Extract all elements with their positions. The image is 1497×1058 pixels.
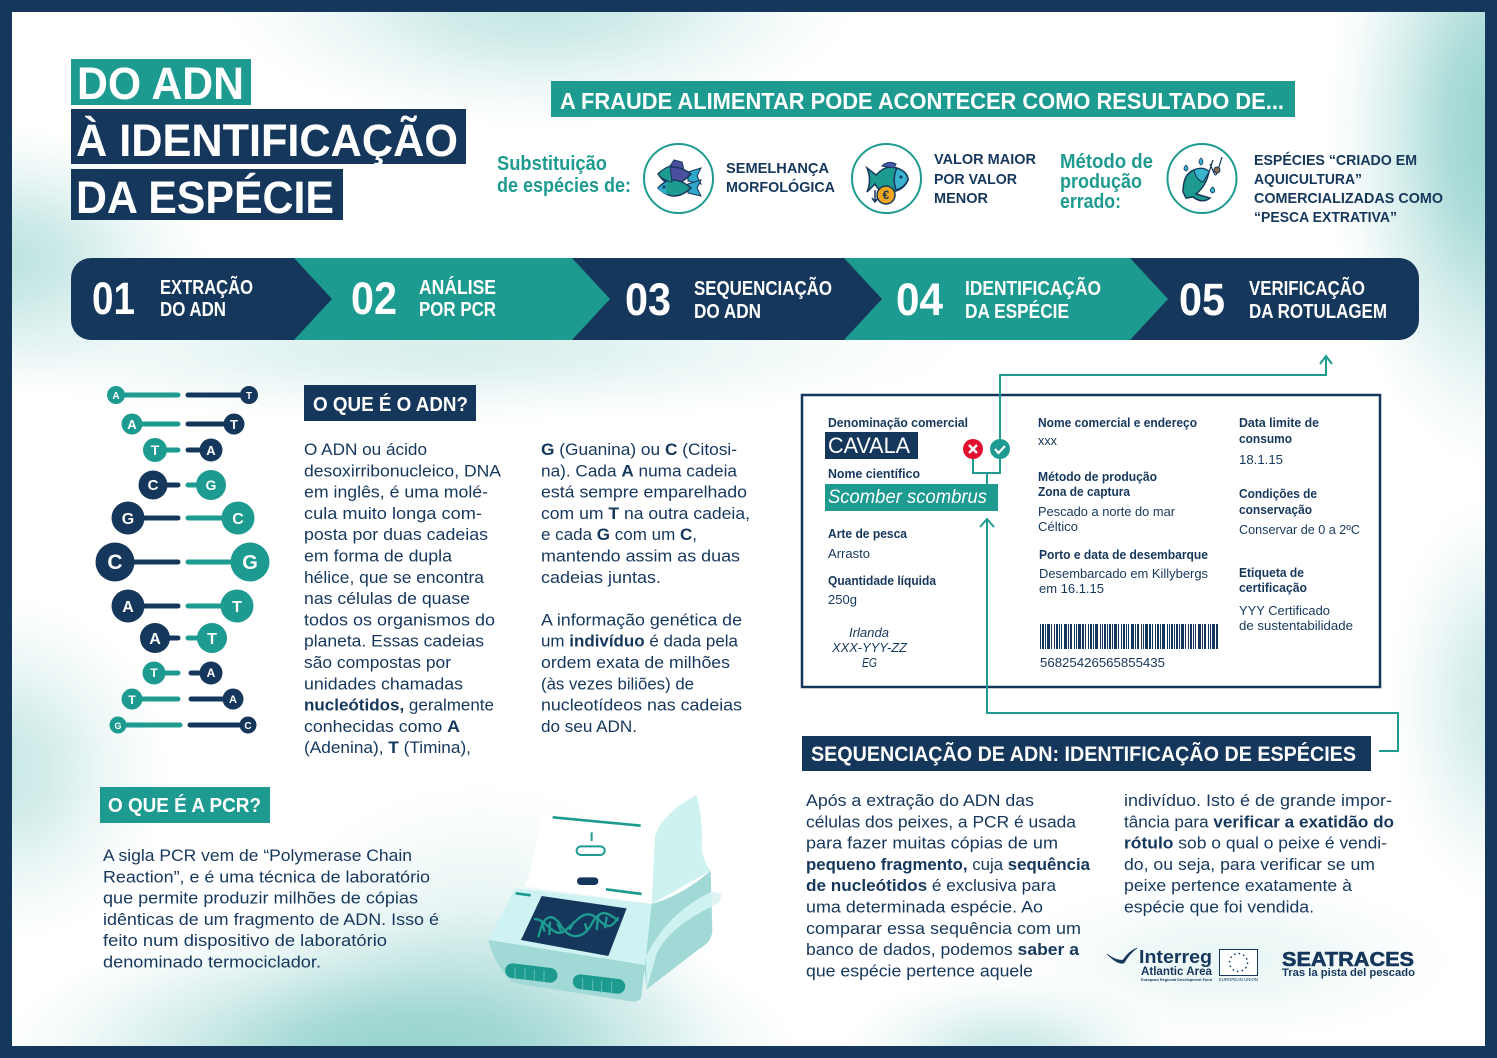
text: what is DNA, column 1: [304, 440, 502, 757]
DNA helix diagram: [96, 386, 270, 734]
icon: fish with euro coin: [852, 144, 921, 213]
text: sequencing, column 1: células dos peixes, a PCR é usada: [806, 812, 1077, 831]
label field: storage conditions: Condições de: [1239, 487, 1317, 501]
DNA helix diagram: A: [127, 417, 137, 432]
step 04: 04: [896, 274, 943, 325]
DNA helix diagram: A: [149, 631, 161, 648]
text: what is DNA, column 1: nucleótidos, geralmente: [304, 696, 494, 715]
label field: fishing gear: Arte de pesca: [828, 527, 908, 541]
text: what is DNA, column 1: em inglês, é uma molé-: [304, 483, 488, 502]
label field: port and landing date: Desembarcado em Killybergs: [1039, 567, 1208, 581]
text: what is DNA, column 1: cula muito longa com-: [304, 504, 482, 523]
heading: food fraud: A FRAUDE ALIMENTAR PODE ACONTECER COMO RESULTADO DE...: [560, 88, 1284, 114]
text: what is PCR: feito num dispositivo de laboratório: [103, 931, 387, 950]
text: what is DNA, column 2: nucleotídeos nas cadeias: [541, 696, 742, 715]
text: what is DNA, column 1: desoxirribonucleico, DNA: [304, 461, 502, 480]
text: what is DNA, column 2: A informação genética de: [541, 610, 742, 629]
step 01: DO ADN: [160, 299, 226, 321]
text: what is DNA, column 1: unidades chamadas: [304, 674, 463, 693]
barcode: 56825426565855435: [1040, 656, 1165, 670]
step 02: 02: [351, 273, 397, 324]
step 01: 01: [92, 273, 135, 324]
heading: food fraud: [551, 81, 1295, 117]
icon: correct mark: [990, 439, 1010, 459]
DNA helix diagram: C: [148, 477, 159, 494]
label field: origin mark: XXX-YYY-ZZ: [831, 641, 907, 655]
DNA helix diagram: T: [207, 631, 217, 648]
text: wrong production method: [1060, 151, 1153, 213]
heading: what is DNA: O QUE É O ADN?: [313, 393, 468, 416]
logo: Interreg Atlantic Area: European Regional Development Fund: [1141, 977, 1213, 982]
text: what is PCR: A sigla PCR vem de “Polymerase Chain: [103, 846, 412, 865]
logo: Interreg Atlantic Area: [1107, 947, 1258, 982]
label field: origin mark: Irlanda: [849, 626, 889, 640]
title: [71, 58, 466, 223]
logo: Seatraces: Tras la pista del pescado: [1282, 967, 1415, 979]
step 04: IDENTIFICAÇÃO: [965, 277, 1101, 300]
text: sequencing, column 2: rótulo sob o qual o peixe é vendi-: [1124, 834, 1387, 853]
step 01: [92, 273, 253, 324]
label field: production method: [1038, 470, 1175, 534]
text: what is PCR: denominado termociclador.: [103, 952, 321, 972]
text: what is DNA, column 2: está sempre emparelhado: [541, 483, 747, 502]
label field: port and landing date: em 16.1.15: [1039, 582, 1104, 596]
text: what is DNA, column 2: na). Cada A numa cadeia: [541, 461, 738, 480]
label field: storage conditions: [1239, 487, 1360, 537]
connector between marks and scientific name: [973, 459, 1000, 484]
label field: production method: Pescado a norte do mar: [1038, 505, 1175, 519]
logo: Interreg Atlantic Area: Atlantic Area: [1141, 966, 1213, 978]
DNA helix diagram: T: [128, 693, 136, 707]
heading: what is PCR: O QUE É A PCR?: [108, 794, 261, 817]
label field: origin mark: EG: [862, 656, 877, 670]
DNA helix diagram: G: [242, 552, 258, 574]
label field: certification: Etiqueta de: [1239, 566, 1304, 580]
text: species substitution: de espécies de:: [497, 175, 631, 197]
label field: certification: YYY Certificado: [1239, 604, 1330, 618]
step 03: SEQUENCIAÇÃO: [694, 277, 832, 300]
DNA helix diagram: G: [114, 721, 122, 731]
step 05: 05: [1179, 274, 1225, 325]
text: what is PCR: Reaction”, e é uma técnica de laboratório: [103, 867, 430, 886]
text: sequencing, column 1: que espécie pertence aquele: [806, 961, 1033, 980]
text: higher value for lower value: MENOR: [934, 190, 988, 207]
text: what is DNA, column 2: G (Guanina) ou C (Citosi-: [541, 440, 737, 459]
text: what is DNA, column 2: com um T na outra cadeia,: [541, 504, 750, 523]
label field: scientific name: [825, 467, 998, 511]
heading: DNA sequencing: [802, 736, 1371, 771]
step 03: [625, 274, 832, 325]
label field: production method: Zona de captura: [1038, 485, 1131, 499]
illustration: thermocycler: [488, 795, 722, 1002]
text: sequencing, column 1: [806, 791, 1091, 980]
text: species substitution: Substituição: [497, 153, 607, 175]
DNA helix diagram: C: [107, 551, 123, 574]
label field: net quantity: Quantidade líquida: [828, 574, 937, 588]
DNA helix diagram: G: [206, 477, 217, 493]
icon: two similar fish: [644, 144, 713, 213]
label field: fishing gear: Arrasto: [828, 547, 870, 561]
DNA helix diagram: T: [232, 599, 242, 616]
logo: Seatraces: SEATRACES: [1282, 949, 1414, 971]
step 04: DA ESPÉCIE: [965, 300, 1069, 323]
DNA helix diagram: A: [229, 694, 237, 706]
text: morphological similarity: MORFOLÓGICA: [726, 178, 835, 196]
text: what is DNA, column 2: (às vezes biliões) de: [541, 674, 694, 693]
DNA helix diagram: C: [244, 721, 252, 732]
text: morphological similarity: SEMELHANÇA: [726, 160, 829, 177]
text: higher value for lower value: VALOR MAIOR: [934, 151, 1036, 168]
DNA helix diagram: A: [206, 443, 216, 458]
text: what is DNA, column 2: [541, 440, 750, 736]
step 04: [896, 274, 1101, 325]
process arrow band: [71, 258, 1419, 340]
label field: use-by date: [1239, 416, 1319, 467]
text: what is DNA, column 1: conhecidas como A: [304, 717, 460, 736]
label field: commercial name: [825, 416, 968, 459]
text: what is PCR: idênticas de um fragmento de ADN. Isso é: [103, 910, 439, 929]
text: higher value for lower value: [934, 151, 1036, 207]
DNA helix diagram: A: [122, 599, 134, 616]
label field: certification: [1239, 566, 1353, 633]
heading: what is DNA: [304, 385, 476, 421]
label field: port and landing date: Porto e data de desembarque: [1039, 548, 1208, 562]
text: sequencing, column 2: do, ou seja, para verificar se um: [1124, 855, 1375, 874]
text: what is DNA, column 1: são compostas por: [304, 653, 451, 672]
heading: DNA sequencing: SEQUENCIAÇÃO DE ADN: IDENTIFICAÇÃO DE ESPÉCIES: [811, 743, 1356, 766]
text: wrong production method: Método de: [1060, 151, 1153, 173]
text: sequencing, column 2: [1124, 791, 1394, 916]
text: what is DNA, column 2: e cada G com um C,: [541, 525, 697, 544]
text: morphological similarity: [726, 160, 835, 196]
text: what is DNA, column 1: (Adenina), T (Timina),: [304, 738, 471, 757]
step 03: 03: [625, 274, 671, 325]
text: wrong production method: produção: [1060, 171, 1142, 193]
label field: storage conditions: conservação: [1239, 503, 1312, 517]
DNA helix diagram: T: [246, 391, 252, 402]
label field: production method: Método de produção: [1038, 470, 1157, 484]
logo: Interreg Atlantic Area: EUROPEAN UNION: [1219, 977, 1258, 982]
text: what is DNA, column 1: hélice, que se encontra: [304, 568, 485, 587]
text: what is DNA, column 1: todos os organismos do: [304, 610, 495, 629]
step 05: DA ROTULAGEM: [1249, 301, 1387, 323]
logo: Interreg Atlantic Area: Interreg: [1139, 947, 1212, 967]
text: higher value for lower value: POR VALOR: [934, 171, 1017, 188]
text: what is DNA, column 1: O ADN ou ácido: [304, 440, 427, 459]
text: what is PCR: que permite produzir milhões de cópias: [103, 889, 418, 908]
label field: use-by date: Data limite de: [1239, 416, 1319, 430]
DNA helix diagram: A: [207, 666, 216, 680]
step 02: [351, 273, 496, 324]
text: what is DNA, column 1: posta por duas cadeias: [304, 525, 488, 544]
icon: wrong mark: [963, 439, 983, 459]
text: farmed species sold as wild catch: AQUICULTURA”: [1254, 171, 1362, 188]
label field: origin mark: [831, 626, 907, 670]
step 05: VERIFICAÇÃO: [1249, 277, 1365, 300]
DNA helix diagram: T: [151, 442, 160, 458]
text: farmed species sold as wild catch: [1254, 152, 1443, 226]
DNA helix diagram: T: [150, 666, 158, 680]
label field: fishing gear: [828, 527, 908, 561]
arrow: sequencing to scientific name: [980, 519, 1398, 751]
text: what is DNA, column 1: planeta. Essas cadeias: [304, 632, 484, 651]
title: À IDENTIFICAÇÃO: [76, 115, 458, 166]
label field: port and landing date: [1039, 548, 1208, 596]
text: what is DNA, column 2: do seu ADN.: [541, 717, 637, 736]
label field: use-by date: consumo: [1239, 432, 1292, 446]
label field: commercial name: Denominação comercial: [828, 416, 968, 430]
text: sequencing, column 2: indivíduo. Isto é de grande impor-: [1124, 791, 1392, 810]
label field: storage conditions: Conservar de 0 a 2ºC: [1239, 523, 1360, 537]
step 03: DO ADN: [694, 301, 761, 323]
label field: certification: de sustentabilidade: [1239, 619, 1353, 633]
label field: use-by date: 18.1.15: [1239, 453, 1283, 467]
text: what is DNA, column 2: cadeias juntas.: [541, 568, 661, 587]
product label card: [802, 395, 1380, 687]
title: DO ADN: [77, 58, 244, 109]
chevron: step 02: [294, 258, 610, 340]
label field: name and address: [1038, 416, 1197, 448]
heading: what is PCR: [100, 787, 270, 823]
arrow: correct mark to labelling check: [1000, 356, 1332, 439]
icon: fish with euro coin: €: [883, 188, 890, 202]
text: farmed species sold as wild catch: COMERCIALIZADAS COMO: [1254, 190, 1443, 207]
DNA helix diagram: G: [122, 511, 134, 528]
label field: production method: Céltico: [1038, 520, 1078, 534]
text: farmed species sold as wild catch: ESPÉCIES “CRIADO EM: [1254, 152, 1417, 169]
label field: scientific name: Nome científico: [828, 467, 920, 481]
step 02: POR PCR: [419, 299, 496, 321]
text: sequencing, column 1: Após a extração do ADN das: [806, 791, 1034, 810]
text: sequencing, column 1: pequeno fragmento, cuja sequência: [806, 855, 1091, 874]
text: wrong production method: errado:: [1060, 191, 1121, 213]
label field: net quantity: 250g: [828, 593, 857, 607]
label field: certification: certificação: [1239, 581, 1307, 595]
text: sequencing, column 1: de nucleótidos é exclusiva para: [806, 876, 1057, 895]
text: what is DNA, column 2: um indivíduo é dada pela: [541, 632, 739, 651]
text: sequencing, column 2: espécie que foi vendida.: [1124, 898, 1314, 916]
DNA helix diagram: T: [230, 417, 238, 432]
text: sequencing, column 2: peixe pertence exatamente à: [1124, 876, 1353, 895]
DNA helix diagram: C: [232, 511, 244, 528]
text: sequencing, column 2: tância para verificar a exatidão do: [1124, 812, 1394, 831]
text: sequencing, column 1: banco de dados, podemos saber a: [806, 940, 1080, 959]
text: sequencing, column 1: para fazer muitas cópias de um: [806, 834, 1058, 853]
DNA helix diagram: A: [112, 391, 120, 402]
logo: Seatraces: [1282, 949, 1415, 979]
label field: net quantity: [828, 574, 937, 607]
label field: scientific name: Scomber scombrus: [828, 487, 987, 508]
label field: name and address: xxx: [1038, 434, 1058, 448]
title: DA ESPÉCIE: [76, 172, 334, 223]
text: what is DNA, column 1: em forma de dupla: [304, 546, 453, 566]
text: what is PCR: [103, 846, 439, 972]
text: sequencing, column 1: comparar essa sequência com um: [806, 919, 1081, 938]
label field: name and address: Nome comercial e endereço: [1038, 416, 1197, 430]
text: sequencing, column 1: uma determinada espécie. Ao: [806, 898, 1043, 916]
step 01: EXTRAÇÃO: [160, 276, 253, 299]
text: what is DNA, column 2: mantendo assim as duas: [541, 546, 740, 566]
text: farmed species sold as wild catch: “PESCA EXTRATIVA”: [1254, 209, 1397, 226]
step 05: [1179, 274, 1387, 325]
text: species substitution: [497, 153, 631, 197]
text: what is DNA, column 2: ordem exata de milhões: [541, 653, 730, 672]
step 02: ANÁLISE: [419, 276, 496, 299]
icon: hooked fish: [1168, 144, 1236, 213]
chevron: step 04: [844, 258, 1168, 340]
text: what is DNA, column 1: nas células de quase: [304, 589, 470, 608]
label field: commercial name: CAVALA: [828, 433, 910, 458]
